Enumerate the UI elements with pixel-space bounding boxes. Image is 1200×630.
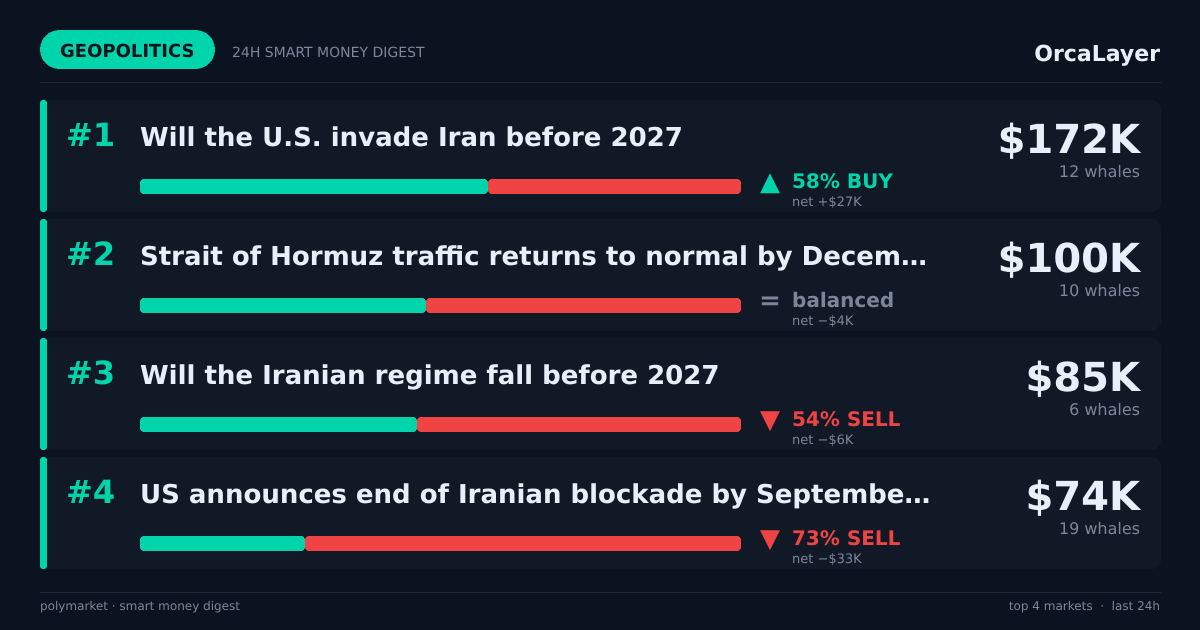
footer left: polymarket · smart money digest bbox=[40, 599, 240, 613]
accent bar bbox=[40, 457, 47, 569]
whale count: 19 whales bbox=[1059, 519, 1140, 538]
category pill bbox=[40, 30, 215, 69]
footer right: top 4 markets · last 24h bbox=[1009, 599, 1160, 613]
whale count: 10 whales bbox=[1059, 281, 1140, 300]
buy/sell bar bbox=[140, 298, 741, 313]
icon: down triangle: ▼ bbox=[760, 405, 780, 435]
rank: #3 bbox=[66, 354, 115, 392]
accent bar bbox=[40, 338, 47, 450]
header bbox=[40, 30, 1160, 69]
rank: #4 bbox=[66, 473, 115, 511]
market title: US announces end of Iranian blockade by Septembe… bbox=[140, 480, 930, 510]
volume: $85K bbox=[1026, 355, 1142, 401]
sentiment: balanced bbox=[792, 288, 894, 312]
volume: $74K bbox=[1026, 474, 1142, 520]
net flow: net −$4K bbox=[792, 314, 854, 329]
volume: $172K bbox=[998, 117, 1142, 163]
buy/sell bar bbox=[140, 536, 741, 551]
subtitle: 24H SMART MONEY DIGEST bbox=[232, 45, 425, 61]
category pill: GEOPOLITICS bbox=[60, 41, 195, 62]
icon: down triangle: ▼ bbox=[760, 524, 780, 554]
market title: Strait of Hormuz traffic returns to normal by Decem… bbox=[140, 242, 927, 272]
sentiment: 58% BUY bbox=[792, 169, 893, 193]
brand: OrcaLayer bbox=[1034, 42, 1160, 67]
accent bar bbox=[40, 100, 47, 212]
card 3 bbox=[40, 338, 1161, 450]
icon: equals: = bbox=[759, 286, 781, 316]
net flow: net −$6K bbox=[792, 433, 854, 448]
buy/sell bar bbox=[140, 417, 741, 432]
market title: Will the U.S. invade Iran before 2027 bbox=[140, 123, 683, 153]
net flow: net −$33K bbox=[792, 552, 862, 567]
icon: up triangle: ▲ bbox=[760, 167, 780, 197]
buy/sell bar bbox=[140, 179, 741, 194]
sentiment: 73% SELL bbox=[792, 526, 901, 550]
rank: #2 bbox=[66, 235, 115, 273]
card 2 bbox=[40, 219, 1161, 331]
market title: Will the Iranian regime fall before 2027 bbox=[140, 361, 719, 391]
whale count: 12 whales bbox=[1059, 162, 1140, 181]
sentiment: 54% SELL bbox=[792, 407, 901, 431]
volume: $100K bbox=[998, 236, 1142, 282]
card 1 bbox=[40, 100, 1161, 212]
accent bar bbox=[40, 219, 47, 331]
whale count: 6 whales bbox=[1069, 400, 1140, 419]
rank: #1 bbox=[66, 116, 115, 154]
net flow: net +$27K bbox=[792, 195, 862, 210]
card 4 bbox=[40, 457, 1161, 569]
